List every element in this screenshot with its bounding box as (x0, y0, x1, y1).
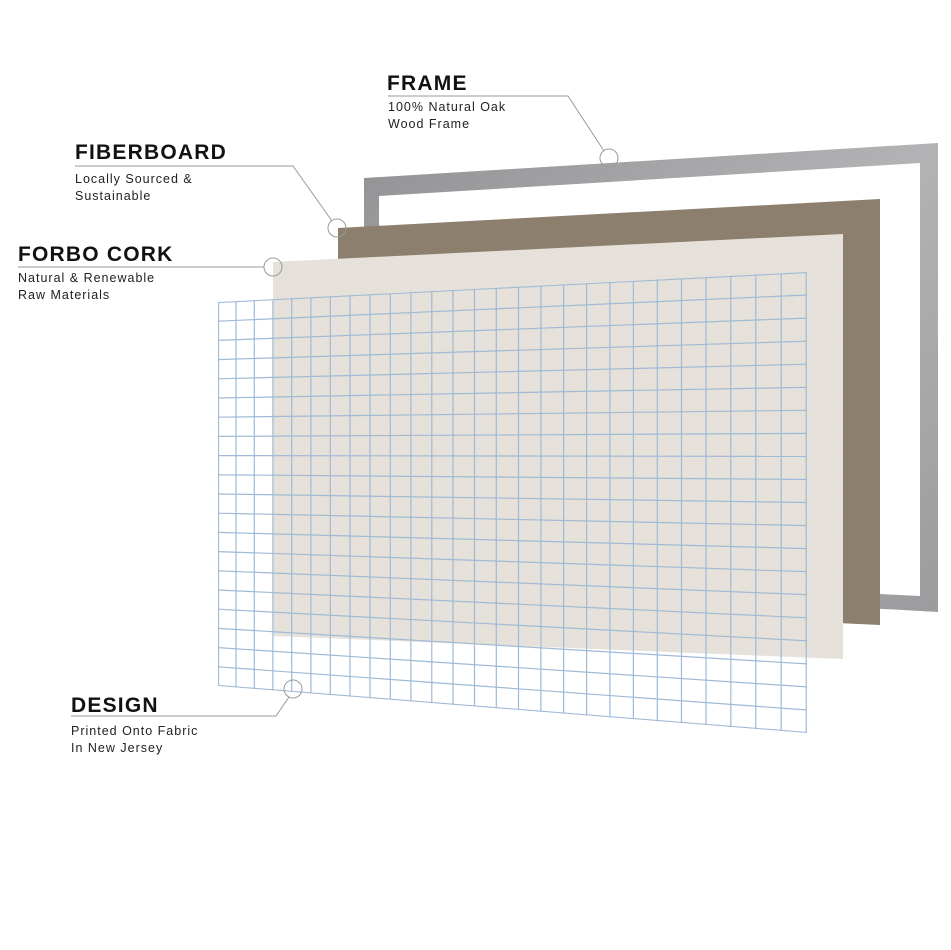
text: fiberboard: Locally Sourced & (75, 172, 193, 186)
leader: fiberboard (75, 166, 346, 237)
heading: fiberboard: FIBERBOARD (75, 141, 227, 164)
text: fiberboard: Sustainable (75, 188, 151, 202)
text: design: Printed Onto Fabric (71, 724, 198, 738)
text: forbo cork: Natural & Renewable (18, 271, 155, 285)
design grid (218, 260, 807, 740)
heading: forbo cork: FORBO CORK (18, 243, 174, 266)
heading: frame: FRAME (387, 72, 468, 95)
text: design (71, 724, 198, 754)
text: frame (388, 100, 506, 130)
text: forbo cork: Raw Materials (18, 288, 110, 302)
text: forbo cork (18, 271, 155, 302)
text: fiberboard (75, 172, 193, 202)
text: frame: Wood Frame (388, 116, 470, 130)
leader: frame (388, 96, 618, 167)
heading: design: DESIGN (71, 694, 159, 717)
fiberboard (338, 199, 880, 625)
text: frame: 100% Natural Oak (388, 100, 506, 114)
leader: cork (18, 258, 282, 276)
frame (364, 143, 938, 612)
cork board (273, 234, 843, 659)
leader: design (71, 680, 302, 716)
text: design: In New Jersey (71, 740, 163, 754)
